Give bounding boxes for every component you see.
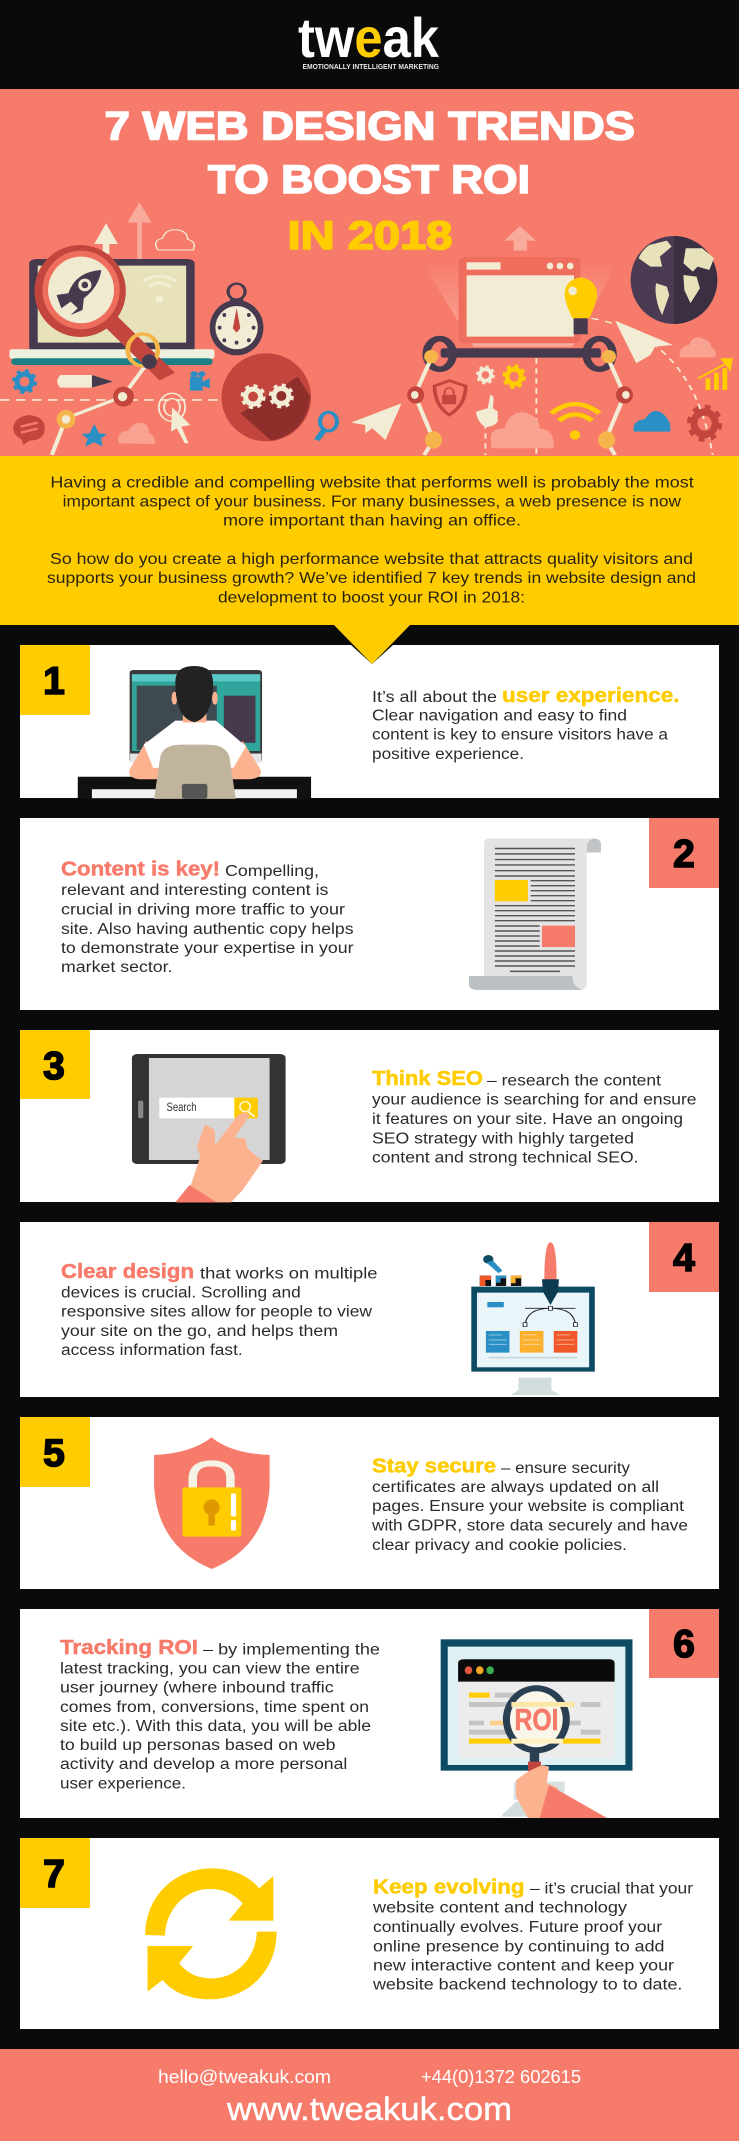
trend 3 text: content and strong technical SEO. bbox=[372, 1150, 638, 1166]
trend 4 text: devices is crucial. Scrolling and bbox=[61, 1284, 301, 1301]
trend 2 text: Content is key! bbox=[61, 859, 220, 881]
icon: sync arrows bbox=[145, 1868, 277, 1999]
trend 2 text: relevant and interesting content is bbox=[61, 882, 329, 899]
number 7: 7 bbox=[43, 1853, 65, 1896]
trend 7 text bbox=[372, 1876, 693, 1993]
number 4: 4 bbox=[673, 1237, 695, 1280]
trend 1 text: It’s all about the bbox=[372, 689, 497, 706]
trend 4 text bbox=[61, 1261, 378, 1359]
trend 5 text: certificates are always updated on all bbox=[372, 1479, 659, 1496]
panel: trend 5 bbox=[20, 1417, 719, 1589]
title: 7 WEB DESIGN TRENDS bbox=[105, 104, 635, 148]
trend 2 text: crucial in driving more traffic to your bbox=[61, 902, 345, 919]
trend 7 text: continually evolves. Future proof your bbox=[373, 1919, 662, 1936]
panel: trend 2 bbox=[20, 818, 719, 1010]
trend 6 text: site etc.). With this data, you will be able bbox=[60, 1718, 371, 1735]
number 3: 3 bbox=[43, 1045, 65, 1088]
icon: shield with padlock bbox=[154, 1437, 270, 1569]
trend 3 text: SEO strategy with highly targeted bbox=[372, 1130, 634, 1147]
number 6: 6 bbox=[673, 1623, 695, 1666]
illustration: ROI magnifier bbox=[441, 1639, 632, 1818]
panel: footer bbox=[0, 2049, 739, 2141]
trend 7 text: online presence by continuing to add bbox=[373, 1938, 664, 1955]
trend 6 text: user journey (where inbound traffic bbox=[60, 1680, 334, 1697]
trend 2 text: Compelling, bbox=[225, 863, 319, 880]
intro text: more important than having an office. bbox=[223, 513, 521, 530]
trend 6 text: user experience. bbox=[60, 1776, 186, 1793]
logo: EMOTIONALLY INTELLIGENT MARKETING bbox=[302, 64, 440, 71]
panel: trend 1 bbox=[20, 645, 719, 799]
intro text: supports your business growth? We’ve identified 7 key trends in website design and bbox=[47, 570, 696, 587]
trend 4 text: that works on multiple bbox=[200, 1265, 378, 1282]
illustration: document bbox=[469, 839, 601, 990]
trend 3 text: your audience is searching for and ensure bbox=[372, 1092, 696, 1109]
intro text bbox=[47, 474, 696, 606]
trend 4 text: your site on the go, and helps them bbox=[61, 1323, 338, 1340]
trend 3 text: it features on your site. Have an ongoing bbox=[372, 1111, 683, 1128]
trend 6 text: latest tracking, you can view the entire bbox=[60, 1660, 360, 1677]
number 4 bbox=[649, 1222, 719, 1292]
illustration: design monitor bbox=[471, 1242, 595, 1395]
trend 1 text: Clear navigation and easy to find bbox=[372, 708, 627, 724]
trend 7 text: new interactive content and keep your bbox=[373, 1958, 674, 1975]
number 2: 2 bbox=[673, 833, 695, 876]
trend 7 text: website content and technology bbox=[372, 1900, 627, 1917]
trend 1 text: user experience. bbox=[502, 685, 680, 707]
number 7 bbox=[20, 1838, 90, 1908]
trend 6 text bbox=[60, 1637, 380, 1793]
trend 7 text: – it’s crucial that your bbox=[530, 1880, 693, 1898]
intro text: So how do you create a high performance website that attracts quality visitors and bbox=[50, 551, 693, 568]
trend 3 text: – research the content bbox=[487, 1072, 662, 1089]
trend 2 text: site. Also having authentic copy helps bbox=[61, 921, 354, 938]
illustration: tablet search bbox=[132, 1054, 286, 1202]
trend 5 text: Stay secure bbox=[372, 1456, 496, 1478]
trend 6 text: activity and develop a more personal bbox=[60, 1756, 347, 1773]
website address: www.tweakuk.com bbox=[226, 2091, 512, 2127]
trend 3 text bbox=[372, 1068, 696, 1166]
trend 7 text: Keep evolving bbox=[373, 1876, 524, 1898]
trend 6 text: to build up personas based on web bbox=[60, 1737, 336, 1754]
trend 5 text: with GDPR, store data securely and have bbox=[371, 1518, 688, 1535]
panel: trend 6 bbox=[20, 1609, 719, 1818]
trend 5 text: pages. Ensure your website is compliant bbox=[372, 1498, 685, 1515]
panel: trend 7 bbox=[20, 1838, 719, 2029]
title: IN 2018 bbox=[288, 214, 452, 258]
illustration: right web graphics bbox=[407, 226, 733, 455]
trend 3 text: Think SEO bbox=[372, 1068, 483, 1090]
number 1 bbox=[20, 645, 90, 715]
illustration: left web graphics bbox=[0, 203, 402, 455]
illustration: tablet search: Search bbox=[166, 1102, 196, 1114]
panel: introduction bbox=[0, 456, 739, 664]
logo: tweak bbox=[298, 6, 440, 69]
panel: hero bbox=[0, 89, 739, 456]
trend 5 text: clear privacy and cookie policies. bbox=[372, 1537, 627, 1554]
trend 4 text: Clear design bbox=[61, 1261, 194, 1283]
trend 2 text: market sector. bbox=[61, 959, 172, 976]
trend 6 text: – by implementing the bbox=[203, 1641, 380, 1658]
trend 6 text: Tracking ROI bbox=[60, 1637, 198, 1659]
panel: trend 3 bbox=[20, 1030, 719, 1202]
illustration: person at computer bbox=[78, 666, 311, 799]
trend 1 text: positive experience. bbox=[372, 746, 524, 763]
trend 1 text: content is key to ensure visitors have a bbox=[372, 727, 668, 744]
trend 6 text: comes from, conversions, time spent on bbox=[60, 1699, 369, 1716]
panel: trend 4 bbox=[20, 1222, 719, 1397]
trend 2 text bbox=[61, 859, 354, 976]
title bbox=[105, 104, 635, 258]
trend 2 text: to demonstrate your expertise in your bbox=[61, 940, 354, 957]
intro text: development to boost your ROI in 2018: bbox=[218, 590, 525, 606]
trend 1 text bbox=[372, 685, 680, 763]
trend 7 text: website backend technology to to date. bbox=[372, 1976, 682, 1993]
contact phone: +44(0)1372 602615 bbox=[421, 2067, 581, 2087]
intro text: Having a credible and compelling website that performs well is probably the most bbox=[50, 474, 694, 492]
number 3 bbox=[20, 1030, 90, 1099]
illustration: ROI magnifier: ROI bbox=[514, 1702, 558, 1737]
number 6 bbox=[649, 1609, 719, 1678]
number 2 bbox=[649, 818, 719, 888]
number 5: 5 bbox=[43, 1432, 65, 1475]
trend 4 text: access information fast. bbox=[61, 1342, 243, 1359]
number 1: 1 bbox=[43, 660, 65, 703]
number 5 bbox=[20, 1417, 90, 1487]
contact email: hello@tweakuk.com bbox=[158, 2067, 331, 2087]
title: TO BOOST ROI bbox=[208, 158, 530, 202]
trend 4 text: responsive sites allow for people to view bbox=[61, 1304, 373, 1321]
intro text: important aspect of your business. For many businesses, a web presence is now bbox=[63, 493, 681, 510]
trend 5 text: – ensure security bbox=[501, 1460, 630, 1477]
trend 5 text bbox=[371, 1456, 688, 1554]
